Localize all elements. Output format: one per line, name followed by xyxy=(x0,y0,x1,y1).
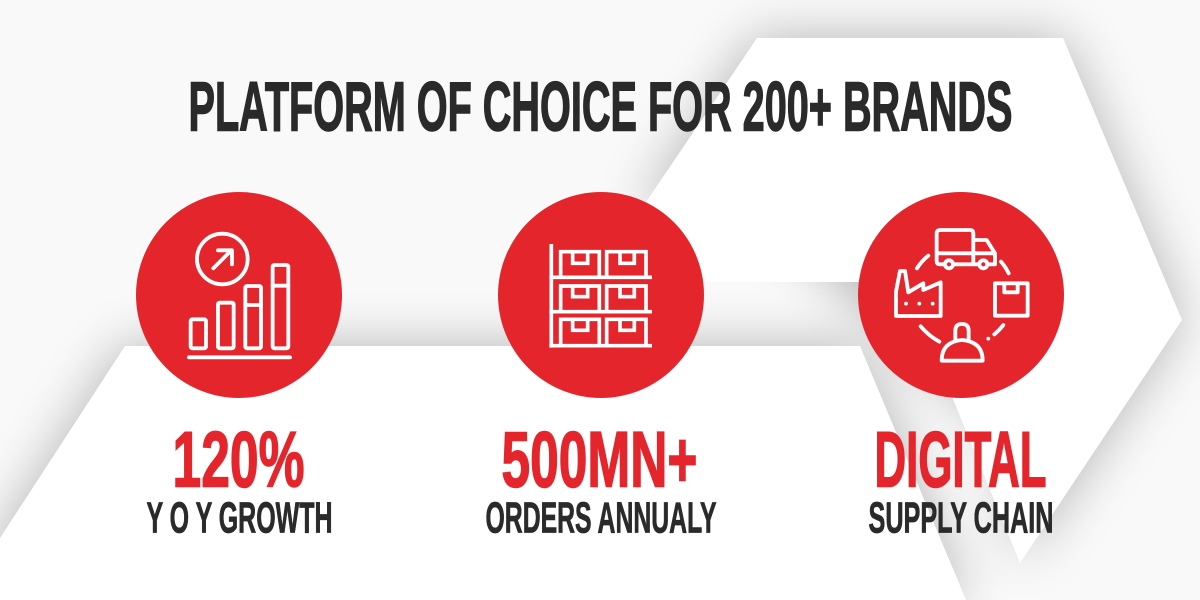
red circle: orders xyxy=(498,192,704,398)
stat: digital: DIGITAL xyxy=(874,414,1046,504)
stat: 120%: 120% xyxy=(172,414,304,504)
icon: supply chain cycle xyxy=(896,230,1028,361)
panel: orders xyxy=(486,192,716,543)
red circle: supply chain xyxy=(858,192,1064,398)
label: supply chain: SUPPLY CHAIN xyxy=(868,494,1054,543)
panel: supply chain xyxy=(858,192,1064,543)
label: orders annualy: ORDERS ANNUALY xyxy=(486,494,716,543)
label: Y O Y growth: Y O Y GROWTH xyxy=(146,494,332,543)
panel: growth xyxy=(136,192,342,543)
red circle: growth xyxy=(136,192,342,398)
icon: bar chart with arrow xyxy=(189,234,290,357)
icon: warehouse shelves xyxy=(549,244,652,348)
stat: 500MN+: 500MN+ xyxy=(502,414,698,504)
